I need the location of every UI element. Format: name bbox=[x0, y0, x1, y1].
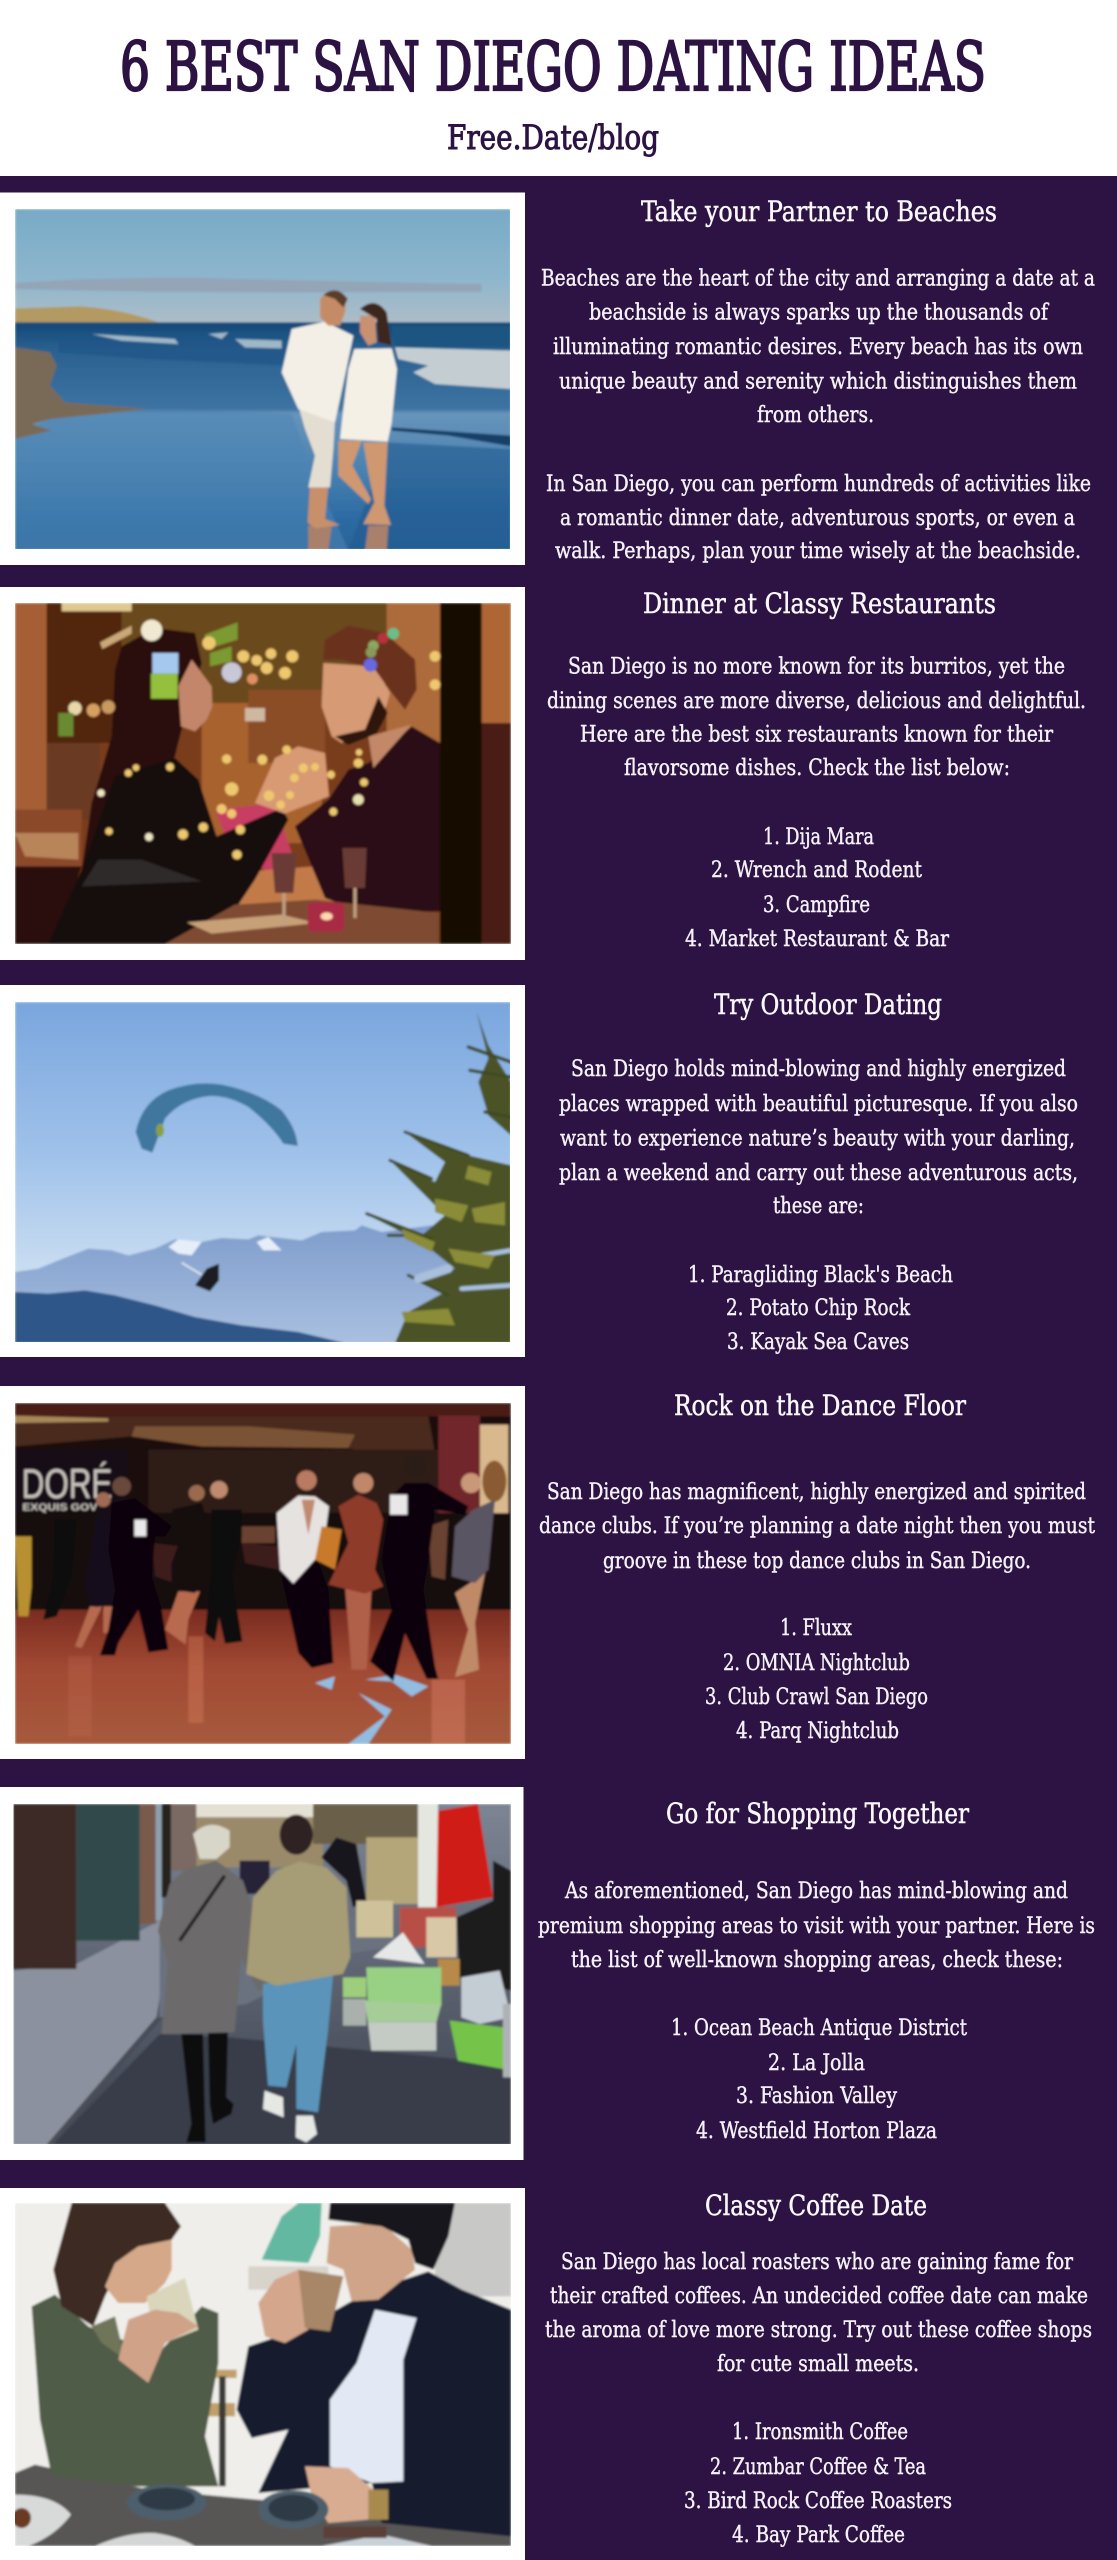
photo frame: ballroom dancers: EXQUIS GOV bbox=[22, 1503, 98, 1514]
paragraph bbox=[538, 1878, 1095, 1973]
list: 1. Dija Mara bbox=[763, 824, 874, 850]
list: 4. Bay Park Coffee bbox=[732, 2522, 905, 2548]
subtitle: Free.Date/blog bbox=[447, 118, 659, 158]
list: 2. Zumbar Coffee & Tea bbox=[710, 2454, 926, 2480]
text block: beaches bbox=[541, 195, 1095, 564]
white-shirt dancer bbox=[282, 1553, 333, 1668]
pine tree bbox=[367, 1012, 511, 1343]
photo frame: dinner couple bbox=[0, 587, 525, 960]
paragraph bbox=[541, 266, 1095, 564]
sequin dress bbox=[455, 1573, 485, 1677]
panel: beaches bbox=[0, 192, 1095, 565]
photo frame: paraglider bbox=[0, 985, 525, 1357]
paragraph: San Diego holds mind-blowing and highly energized bbox=[571, 1056, 1066, 1082]
photo frame: couple shopping bbox=[0, 1787, 524, 2160]
paragraph: San Diego has local roasters who are gaining fame for bbox=[561, 2249, 1073, 2275]
list: 3. Bird Rock Coffee Roasters bbox=[684, 2488, 952, 2514]
list bbox=[684, 2419, 952, 2548]
photo frame: ballroom dancers bbox=[0, 1386, 525, 1759]
heading: Classy Coffee Date bbox=[705, 2189, 927, 2222]
flowers bbox=[315, 1526, 342, 1570]
sign lettering: DORÉ bbox=[22, 1460, 112, 1507]
paragraph: As aforementioned, San Diego has mind-blowing and bbox=[564, 1878, 1068, 1904]
bokeh bbox=[58, 603, 440, 859]
wing bbox=[136, 1083, 298, 1153]
heading: Dinner at Classy Restaurants bbox=[643, 587, 996, 620]
list: 4. Westfield Horton Plaza bbox=[696, 2118, 937, 2144]
list bbox=[705, 1615, 928, 1744]
list: 3. Fashion Valley bbox=[736, 2083, 898, 2109]
paragraph: plan a weekend and carry out these adventurous acts, bbox=[559, 1160, 1078, 1186]
photo frame: couple drinking coffee bbox=[0, 2188, 525, 2560]
paragraph: walk. Perhaps, plan your time wisely at the beachside. bbox=[555, 538, 1081, 564]
table bbox=[165, 900, 438, 944]
panel: dance bbox=[0, 1386, 1095, 1759]
heading: Rock on the Dance Floor bbox=[674, 1389, 967, 1422]
list bbox=[685, 824, 949, 952]
paragraph: want to experience nature’s beauty with your darling, bbox=[560, 1126, 1075, 1152]
reflections bbox=[308, 526, 388, 550]
text block: restaurants bbox=[547, 587, 1086, 952]
text block: dance bbox=[539, 1389, 1095, 1744]
paragraph: beachside is always sparks up the thousands of bbox=[589, 300, 1049, 326]
paragraph bbox=[547, 654, 1086, 781]
man legs bbox=[308, 486, 340, 528]
table bbox=[15, 2465, 511, 2546]
clasped hands bbox=[255, 746, 329, 814]
woman bbox=[32, 2295, 218, 2486]
dark dancer right bbox=[370, 1483, 468, 1681]
text block: coffee bbox=[545, 2189, 1092, 2548]
red dress bbox=[345, 1586, 372, 1670]
list bbox=[671, 2015, 967, 2144]
woman bbox=[82, 628, 202, 870]
woman legs bbox=[338, 441, 391, 525]
paragraph: In San Diego, you can perform hundreds of activities like bbox=[546, 471, 1091, 497]
wall and window bbox=[13, 1804, 76, 1969]
panel: outdoor bbox=[0, 985, 1078, 1357]
pilot bbox=[195, 1264, 219, 1291]
paragraph: places wrapped with beautiful picturesque. If you also bbox=[559, 1091, 1078, 1117]
dishes bbox=[127, 2484, 206, 2520]
paragraph bbox=[559, 1056, 1078, 1219]
paragraph: flavorsome dishes. Check the list below: bbox=[624, 755, 1010, 781]
dark surf bands bbox=[70, 350, 285, 364]
woman bbox=[181, 2031, 234, 2142]
list: 2. Potato Chip Rock bbox=[726, 1295, 911, 1321]
man bbox=[295, 726, 440, 913]
paragraph: for cute small meets. bbox=[717, 2351, 919, 2377]
list: 3. Kayak Sea Caves bbox=[727, 1329, 909, 1355]
list: 2. La Jolla bbox=[768, 2050, 865, 2076]
text block: shopping bbox=[538, 1797, 1095, 2144]
list bbox=[688, 1262, 953, 1355]
paragraph: the list of well-known shopping areas, check these: bbox=[571, 1947, 1063, 1973]
text block: outdoor bbox=[559, 988, 1078, 1355]
man bbox=[237, 2271, 511, 2536]
man bbox=[263, 1976, 333, 2112]
list: 3. Club Crawl San Diego bbox=[705, 1684, 928, 1710]
heading: Take your Partner to Beaches bbox=[641, 195, 997, 228]
sand bbox=[15, 347, 148, 439]
panel: coffee bbox=[0, 2188, 1092, 2560]
paragraph: illuminating romantic desires. Every beach has its own bbox=[553, 334, 1083, 360]
paragraph: a romantic dinner date, adventurous sports, or even a bbox=[560, 505, 1075, 531]
header band bbox=[0, 0, 1117, 176]
panel: shopping bbox=[0, 1787, 1095, 2160]
paragraph bbox=[545, 2249, 1092, 2377]
list: 1. Ocean Beach Antique District bbox=[671, 2015, 967, 2041]
paragraph: Here are the best six restaurants known for their bbox=[580, 722, 1053, 748]
paragraph: groove in these top dance clubs in San Diego. bbox=[603, 1548, 1031, 1574]
list: 1. Ironsmith Coffee bbox=[732, 2419, 908, 2445]
list: 2. OMNIA Nightclub bbox=[723, 1650, 910, 1676]
paragraph: from others. bbox=[757, 402, 874, 428]
paragraph: these are: bbox=[773, 1193, 864, 1219]
candle and glasses bbox=[308, 902, 344, 932]
paragraph: dining scenes are more diverse, delicious and delightful. bbox=[547, 688, 1086, 714]
panel: restaurants bbox=[0, 587, 1086, 960]
list: 1. Fluxx bbox=[780, 1615, 853, 1641]
background crowd and stalls bbox=[196, 1804, 313, 1817]
dancer silhouettes bbox=[15, 1536, 32, 1616]
list: 3. Campfire bbox=[763, 892, 870, 918]
heading: Go for Shopping Together bbox=[666, 1797, 970, 1830]
paragraph bbox=[539, 1479, 1095, 1574]
list: 4. Market Restaurant & Bar bbox=[685, 926, 949, 952]
list: 4. Parq Nightclub bbox=[736, 1718, 899, 1744]
paragraph: unique beauty and serenity which distinguishes them bbox=[559, 368, 1077, 394]
list: 2. Wrench and Rodent bbox=[711, 857, 922, 883]
wet sand ripples bbox=[15, 409, 348, 550]
bins bbox=[343, 1977, 366, 1997]
photo frame: couple on beach bbox=[0, 192, 525, 565]
list: 1. Paragliding Black's Beach bbox=[688, 1262, 953, 1288]
paragraph: San Diego is no more known for its burritos, yet the bbox=[568, 654, 1065, 680]
heading: Try Outdoor Dating bbox=[714, 988, 942, 1021]
